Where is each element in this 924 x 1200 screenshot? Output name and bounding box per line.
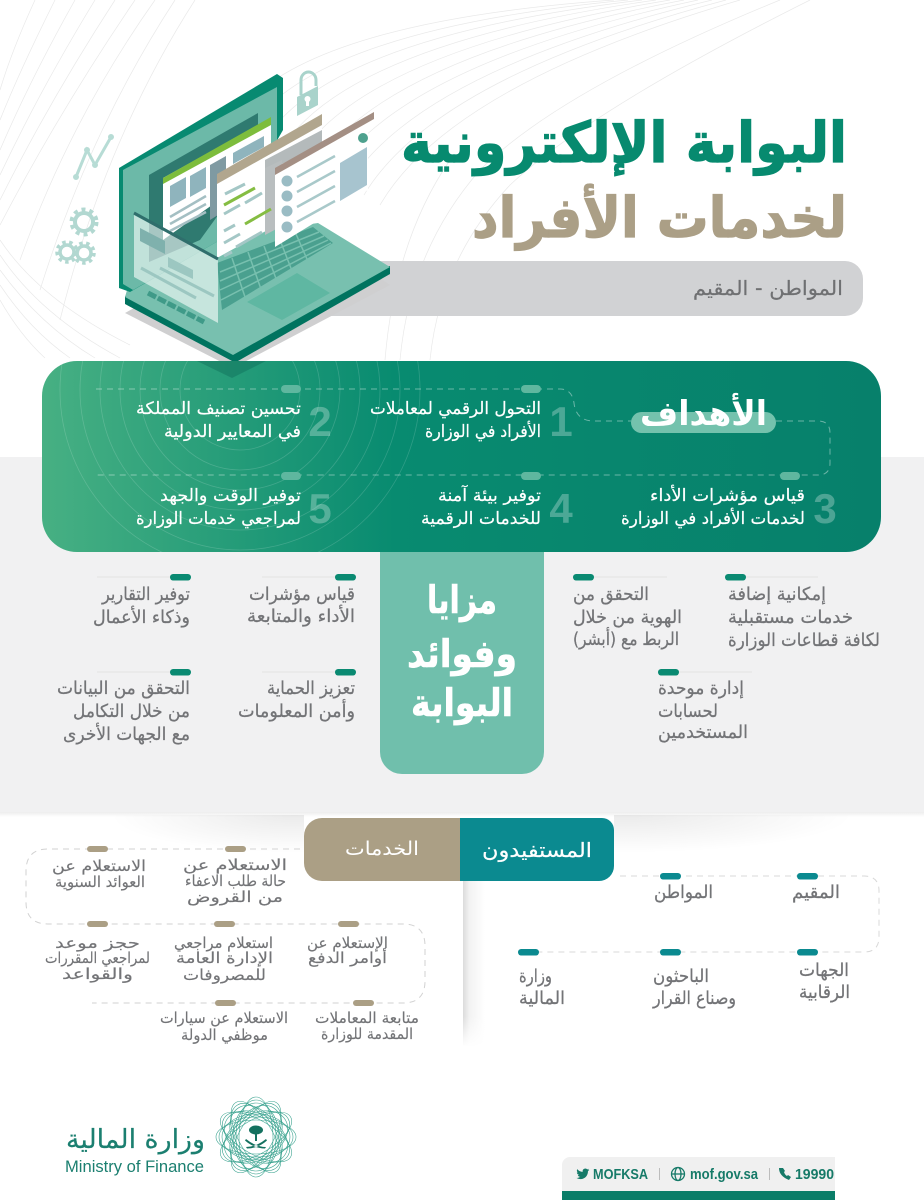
- title: البوابة الإلكترونية: [401, 111, 847, 176]
- benefit: unified accounts: إدارة موحدة: [658, 678, 744, 699]
- window: translucent foreground: [134, 213, 218, 323]
- benefit: information security: تعزيز الحماية: [267, 678, 355, 699]
- service: government cars: [160, 1009, 288, 1045]
- objective 2: في المعايير الدولية: [164, 422, 301, 442]
- service: payment orders: أوامر الدفع: [308, 948, 387, 967]
- service: appointment booking: [45, 934, 150, 983]
- benefit: identity verification: التحقق من: [573, 584, 649, 605]
- panel: benefits heading: مزايا: [427, 578, 497, 622]
- objective 2: [136, 398, 332, 445]
- beneficiary: ministry of finance: وزارة: [519, 966, 552, 987]
- benefit: information security: وأمن المعلومات: [238, 699, 355, 722]
- service: expenditures inquiry: للمصروفات: [183, 966, 266, 984]
- objective 4: 4: [549, 485, 573, 532]
- objective 5: [136, 485, 332, 532]
- beneficiary: ministry of finance: [519, 966, 565, 1009]
- service: loan exemption: من القروض: [187, 888, 283, 906]
- label: twitter handle: MOFKSA: [593, 1166, 648, 1183]
- beneficiary: researchers and decision makers: [652, 966, 736, 1009]
- benefit: reports and BI: [93, 574, 191, 628]
- panel: benefits heading: [380, 552, 544, 774]
- logo: ministry of finance: [65, 1094, 299, 1180]
- objective 5: لمراجعي خدمات الوزارة: [136, 509, 301, 529]
- service: expenditures inquiry: الإدارة العامة: [176, 949, 273, 967]
- objective 1: التحول الرقمي لمعاملات: [370, 399, 541, 419]
- benefit: performance indicators: [247, 574, 356, 627]
- benefit: data verification: التحقق من البيانات: [57, 678, 190, 699]
- footer contact bar: [562, 1157, 835, 1200]
- service: loan exemption: [183, 856, 287, 906]
- benefit: identity verification: الربط مع (أبشر): [573, 627, 679, 650]
- logo: ministry of finance: Ministry of Finance: [65, 1158, 204, 1176]
- window: green dashboard: [163, 117, 271, 240]
- benefit: future services: لكافة قطاعات الوزارة: [728, 630, 880, 651]
- panel: objectives: [42, 361, 881, 552]
- laptop illustration: [119, 74, 390, 368]
- benefit: information security: [238, 669, 356, 722]
- panel: benefits heading: وفوائد: [407, 632, 517, 677]
- benefit: reports and BI: توفير التقارير: [101, 584, 190, 605]
- benefit: data verification: من خلال التكامل: [73, 701, 190, 722]
- service: payment orders: الإستعلام عن: [307, 934, 388, 952]
- beneficiary: oversight bodies: الرقابية: [799, 982, 850, 1003]
- service: appointment booking: والقواعد: [62, 965, 133, 983]
- beneficiary: ministry of finance: المالية: [519, 988, 565, 1009]
- service: appointment booking: لمراجعي المقررات: [45, 949, 150, 968]
- benefit: unified accounts: [658, 669, 752, 743]
- service: track transactions: متابعة المعاملات: [315, 1009, 419, 1027]
- trackpad: [247, 273, 330, 320]
- objective 1: 1: [549, 398, 573, 445]
- objective 4: توفير بيئة آمنة: [438, 484, 541, 506]
- objective 5: توفير الوقت والجهد: [160, 486, 301, 506]
- subtitle pill: المواطن - المقيم: [693, 276, 843, 300]
- icon: phone: [779, 1168, 791, 1180]
- objective 2: 2: [308, 398, 332, 445]
- benefit: reports and BI: وذكاء الأعمال: [93, 606, 190, 628]
- keyboard: [217, 227, 333, 310]
- icon: twitter: [576, 1169, 589, 1179]
- logo palm and swords: [245, 1126, 267, 1148]
- beneficiary: citizen: المواطن: [654, 882, 713, 903]
- benefit: performance indicators: قياس مؤشرات: [249, 584, 355, 605]
- panel: benefits heading: البوابة: [411, 681, 513, 725]
- service: appointment booking: حجز موعد: [55, 934, 140, 952]
- service: annual returns: [52, 857, 146, 891]
- icon: padlock: [297, 72, 318, 116]
- icon: line graph: [74, 134, 114, 180]
- service: annual returns: الاستعلام عن: [52, 857, 146, 875]
- tab: services: الخدمات: [345, 838, 419, 860]
- window: tan list: [217, 114, 322, 258]
- service: track transactions: المقدمة للوزارة: [321, 1025, 413, 1043]
- service: loan exemption: الاستعلام عن: [183, 856, 287, 874]
- logo: ministry of finance: وزارة المالية: [66, 1125, 205, 1155]
- service: track transactions: [315, 1009, 419, 1043]
- label: phone number: 19990: [795, 1166, 834, 1183]
- benefit: future services: خدمات مستقبلية: [728, 607, 853, 628]
- beneficiary: researchers and decision makers: وصناع القرار: [652, 988, 736, 1009]
- beneficiary: researchers and decision makers: الباحثون: [653, 966, 709, 987]
- beneficiary: oversight bodies: الجهات: [799, 960, 849, 981]
- benefit: identity verification: الهوية من خلال: [573, 607, 682, 628]
- objective 1: الأفراد في الوزارة: [425, 421, 541, 442]
- window: brown panel: [275, 112, 374, 247]
- objective 2: تحسين تصنيف المملكة: [136, 399, 301, 419]
- benefit: data verification: مع الجهات الأخرى: [63, 723, 190, 745]
- label: website: mof.gov.sa: [690, 1166, 759, 1183]
- service: payment orders: [307, 934, 388, 967]
- benefit: future services: [725, 574, 880, 651]
- objective 3: لخدمات الأفراد في الوزارة: [621, 508, 805, 529]
- service: government cars: الاستعلام عن سيارات: [160, 1009, 288, 1027]
- objectives heading: الأهداف: [640, 392, 767, 434]
- service: expenditures inquiry: استعلام مراجعي: [174, 934, 273, 953]
- objective 1: [370, 398, 573, 445]
- subtitle pill: [330, 261, 863, 316]
- objective 3: 3: [813, 485, 837, 532]
- benefit: unified accounts: المستخدمين: [658, 722, 748, 743]
- benefit: performance indicators: الأداء والمتابعة: [247, 605, 355, 627]
- icon: globe: [672, 1168, 684, 1180]
- objective 4: [421, 484, 573, 532]
- tab: beneficiaries: [460, 818, 614, 881]
- objective 3: [621, 485, 837, 532]
- objective 5: 5: [308, 485, 332, 532]
- benefit: future services: إمكانية إضافة: [728, 584, 826, 605]
- logo rosette: [213, 1094, 299, 1180]
- icon: gears: [57, 210, 96, 263]
- service: annual returns: العوائد السنوية: [55, 873, 145, 891]
- objective 4: للخدمات الرقمية: [421, 509, 541, 529]
- service: government cars: موظفي الدولة: [181, 1026, 268, 1045]
- title: لخدمات الأفراد: [472, 183, 847, 251]
- tab: beneficiaries: المستفيدون: [482, 838, 592, 862]
- title: [401, 111, 847, 251]
- service: loan exemption: حالة طلب الاعفاء: [185, 872, 286, 890]
- beneficiary: resident: المقيم: [792, 882, 840, 903]
- benefit: identity verification: [573, 574, 682, 650]
- benefit: data verification: [57, 669, 191, 745]
- beneficiary: oversight bodies: [799, 960, 850, 1003]
- service: expenditures inquiry: [174, 934, 273, 984]
- tab: services: [304, 818, 460, 881]
- benefit: unified accounts: لحسابات: [658, 701, 718, 722]
- objective 3: قياس مؤشرات الأداء: [650, 485, 805, 506]
